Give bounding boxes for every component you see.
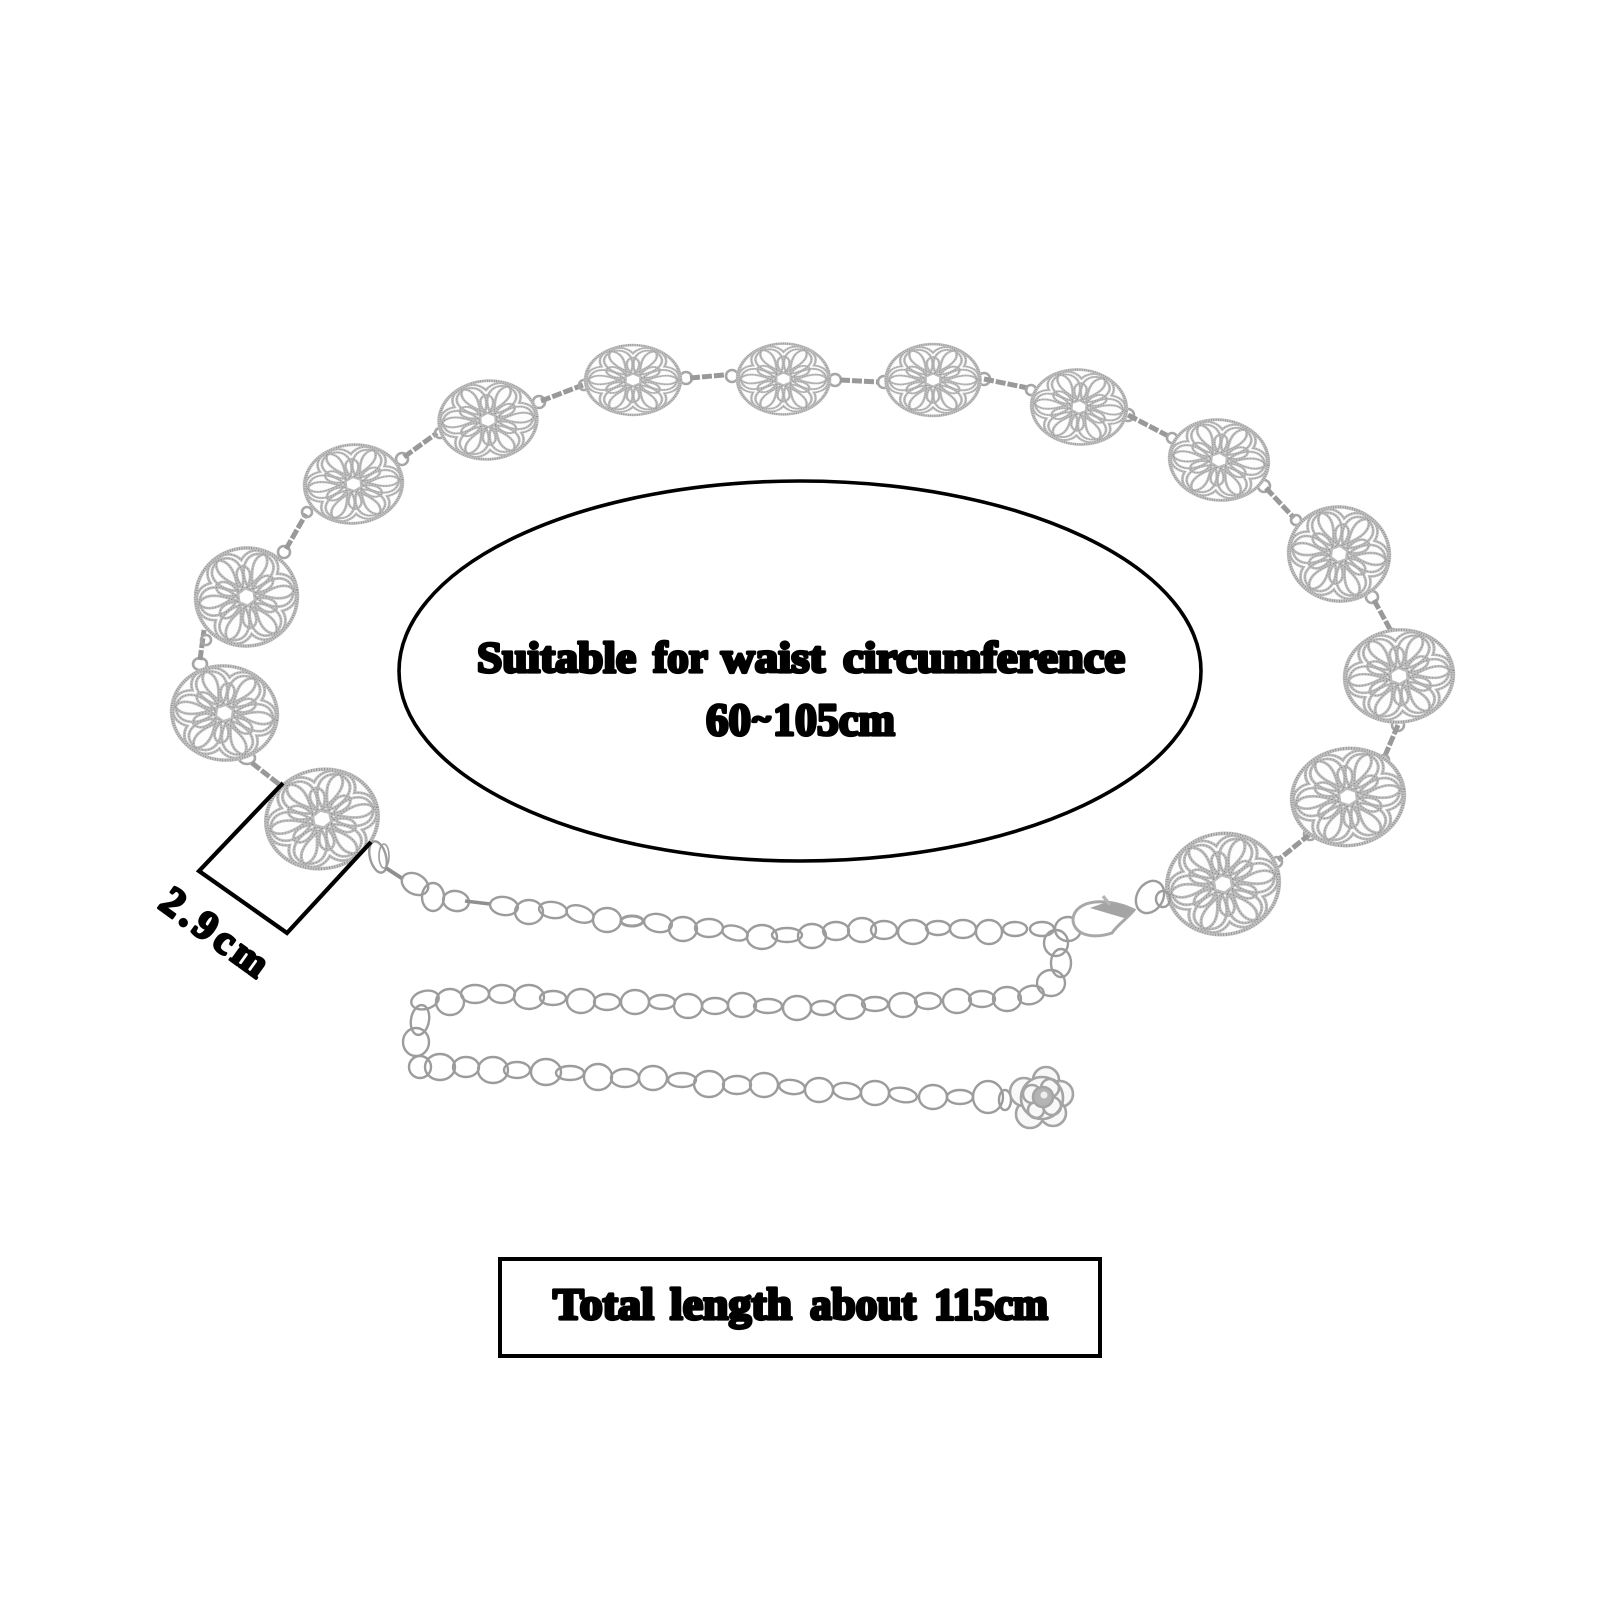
callout ellipse: waist circumference [399, 481, 1201, 861]
text: total length: length [670, 1280, 792, 1329]
disc 3 [180, 536, 313, 658]
disc 6 [577, 342, 689, 418]
connector links between discs [193, 370, 1404, 867]
disc 8 [878, 341, 988, 419]
disc 11 [1273, 495, 1405, 613]
text: total length: Total [553, 1280, 654, 1329]
belt: filigree disc section [156, 340, 1468, 950]
belt: extension chain [366, 839, 1170, 1128]
disc 9 [1020, 362, 1138, 452]
disc 13 [1275, 735, 1421, 859]
icon: rose charm [1010, 1067, 1073, 1128]
text: waist line 2: 105cm [773, 694, 895, 745]
callout box: total length [500, 1259, 1100, 1356]
disc 7 [729, 340, 838, 418]
chain: middle run [409, 985, 1021, 1020]
disc 14 [1148, 818, 1298, 950]
disc 4 [292, 436, 415, 532]
text: waist line 2: 60 [706, 694, 751, 745]
chain: lower run to rose [425, 1054, 1011, 1113]
text: waist line 1: waist [721, 635, 826, 682]
disc 12 [1330, 619, 1468, 733]
text: waist line 1: Suitable [477, 635, 636, 682]
disc 1 [246, 752, 398, 886]
chain: connector at first disc [366, 839, 403, 879]
text: total length: 115cm [934, 1280, 1048, 1329]
disc 10 [1157, 410, 1281, 510]
text: total length: about [810, 1280, 916, 1329]
dimension bracket: disc width [152, 783, 371, 986]
disc 2 [156, 654, 293, 772]
chain: right turn [1016, 930, 1071, 1007]
chain: upper run to clasp [398, 869, 1081, 949]
icon: lobster clasp [1073, 876, 1170, 936]
text: 2.9cm: 2.9cm [152, 877, 278, 986]
text: waist line 2: ~ [753, 707, 771, 733]
text: waist line 1: circumference [843, 635, 1125, 682]
text: waist line 1: for [653, 635, 708, 682]
chain: left turn [403, 1004, 431, 1078]
disc 5 [428, 373, 548, 467]
